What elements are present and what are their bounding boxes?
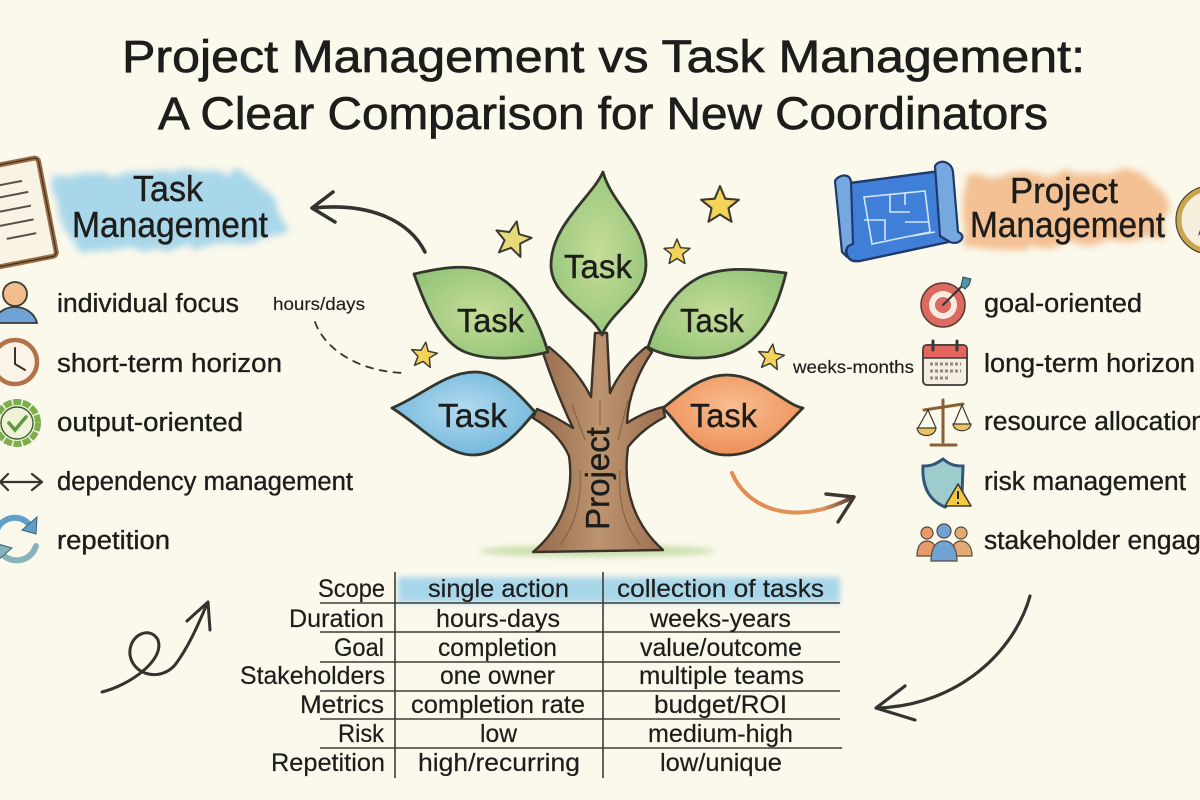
text: goal-oriented: goal-oriented (984, 290, 1142, 318)
icon: clipboard (0, 148, 57, 271)
tree diagram (392, 172, 803, 557)
title: Project Management vs Task Management: (122, 31, 1085, 82)
heading: task management: Task (133, 168, 204, 209)
arrow: tree to project management (732, 473, 854, 522)
grass (479, 545, 715, 557)
project column: weeks-years (649, 605, 791, 633)
leaf: blue: Task (438, 397, 508, 434)
dashed connector (315, 322, 405, 373)
icon: person (0, 282, 37, 323)
leaf: orange (663, 375, 803, 455)
leaf: upper left (414, 267, 548, 358)
heading: project management (970, 170, 1165, 245)
text: resource allocation: resource allocation (984, 408, 1200, 436)
task column: hours-days (436, 605, 560, 633)
leaf: orange: Task (690, 397, 757, 434)
task column: single action (428, 575, 569, 603)
task column: high/recurring (418, 749, 580, 777)
leaf: blue (392, 372, 535, 455)
heading: task management: Management (72, 204, 268, 245)
icon: scales (917, 400, 971, 445)
leaf: upper right: Task (680, 302, 744, 339)
bark lines (560, 400, 640, 545)
row labels: Repetition (271, 749, 385, 777)
row labels: Scope (318, 575, 385, 603)
project column: low/unique (660, 749, 782, 777)
project column (617, 575, 824, 777)
icon: calendar (923, 341, 967, 385)
task column: completion rate (411, 691, 585, 719)
text: long-term horizon: long-term horizon (984, 350, 1195, 378)
arrow: project to table (876, 596, 1030, 720)
task column: one owner (440, 662, 555, 690)
row labels: Duration (289, 605, 384, 633)
text: short-term horizon: short-term horizon (57, 350, 282, 378)
row labels: Goal (334, 634, 384, 662)
heading: task management (72, 168, 268, 245)
leaf: top: Task (564, 248, 632, 285)
icon: compass (1176, 186, 1200, 254)
leaf: top (551, 172, 646, 335)
icon: clock (0, 340, 37, 384)
highlight band (398, 577, 840, 603)
icon: stakeholders (917, 524, 972, 561)
table rules (320, 572, 842, 778)
blue heading swash (52, 170, 286, 252)
stars (410, 186, 786, 370)
comparison table (240, 572, 842, 778)
title: A Clear Comparison for New Coordinators (158, 88, 1048, 139)
orange heading swash (964, 172, 1166, 250)
icon: green badge (0, 402, 38, 444)
trunk (533, 333, 665, 552)
label: hours/days: hours/days (273, 294, 365, 314)
leaf: upper left: Task (457, 302, 524, 339)
project column: collection of tasks (617, 575, 824, 603)
text: repetition: repetition (57, 527, 170, 555)
arrow: tree to task management (312, 192, 425, 252)
row labels: Risk (338, 720, 384, 748)
panel: project management (792, 162, 1200, 561)
icon: shield warning (923, 459, 971, 507)
row labels: Stakeholders (240, 662, 385, 690)
text: dependency management: dependency management (57, 468, 353, 496)
text: individual focus: individual focus (57, 290, 239, 318)
project column: value/outcome (640, 634, 802, 662)
task column: low (480, 720, 518, 748)
project column: multiple teams (639, 662, 804, 690)
icon: double arrow (0, 474, 42, 490)
text: output-oriented: output-oriented (57, 409, 243, 437)
panel: task management (0, 148, 405, 561)
arrow: looped up (102, 602, 210, 692)
trunk label: project: Project (579, 427, 616, 530)
leaf: upper right (648, 269, 786, 358)
label: weeks-months: weeks-months (792, 357, 914, 377)
project column: medium-high (648, 720, 793, 748)
text: risk management: risk management (984, 468, 1186, 496)
heading: project management: Project (1010, 170, 1118, 211)
task column (411, 575, 585, 777)
row labels: Metrics (300, 691, 384, 719)
task column: completion (438, 634, 557, 662)
row labels (240, 575, 385, 777)
heading: project management: Management (970, 204, 1165, 245)
title (122, 31, 1085, 139)
icon: target (921, 277, 971, 327)
project column: budget/ROI (654, 691, 787, 719)
icon: repeat (0, 517, 37, 561)
icon: blueprint (835, 162, 962, 261)
